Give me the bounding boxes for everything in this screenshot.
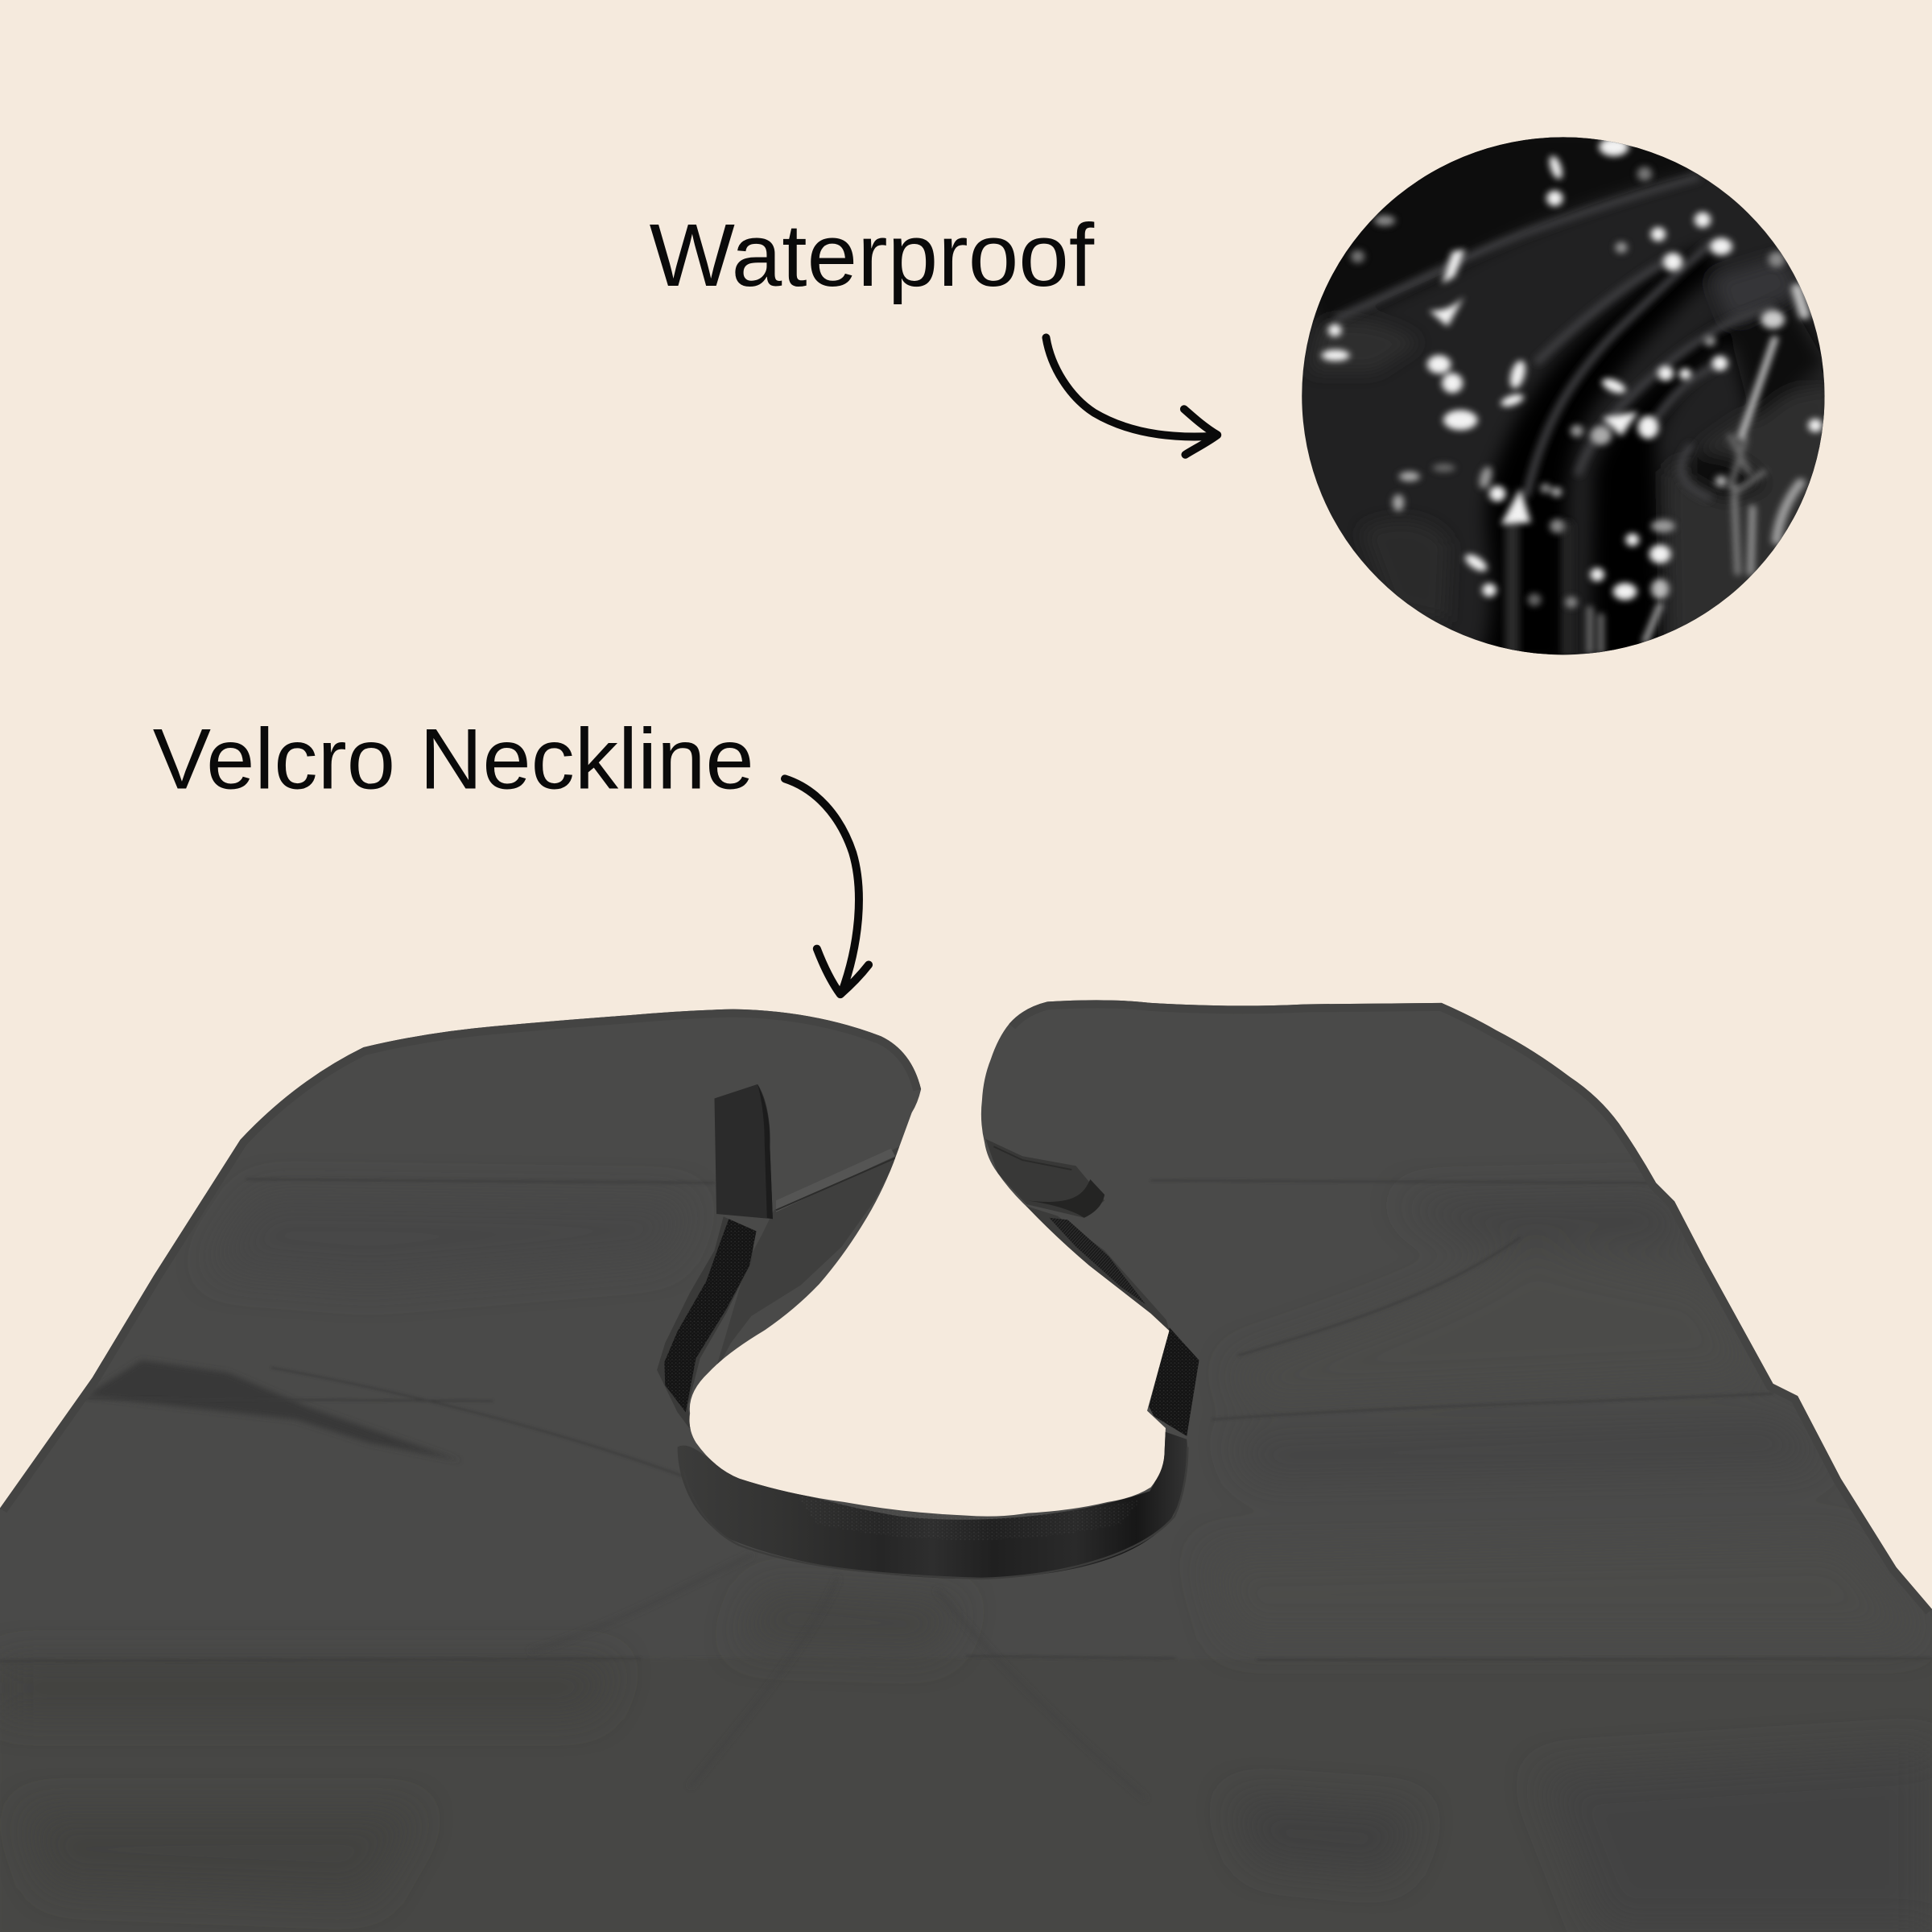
band speckle (797, 1495, 1141, 1540)
dark diagonal wrinkle (91, 1360, 439, 1455)
heading: Waterproof: Waterproof (650, 206, 1095, 305)
arrow: to waterproof detail (1046, 337, 1217, 455)
cape body (0, 985, 1932, 1932)
black cape photo (0, 985, 1932, 1932)
fabric folds and seams (0, 1000, 1932, 1932)
left inner flap (714, 1146, 899, 1374)
heading: Velcro Neckline: Velcro Neckline (153, 711, 754, 807)
cape edge binding (0, 1000, 1932, 1609)
detail circle: water droplets on fabric (1294, 127, 1834, 667)
neck band (678, 1431, 1187, 1579)
right hook velcro tab (1149, 1327, 1199, 1436)
neckline hardware (657, 1084, 1199, 1579)
arrow: to neckline (785, 778, 869, 994)
left strap tab (714, 1084, 773, 1219)
left hook velcro (657, 1216, 756, 1431)
right flap (985, 1139, 1104, 1218)
soft wrinkles below the neck (530, 1555, 1146, 1799)
right loop velcro strip (1021, 1204, 1170, 1333)
